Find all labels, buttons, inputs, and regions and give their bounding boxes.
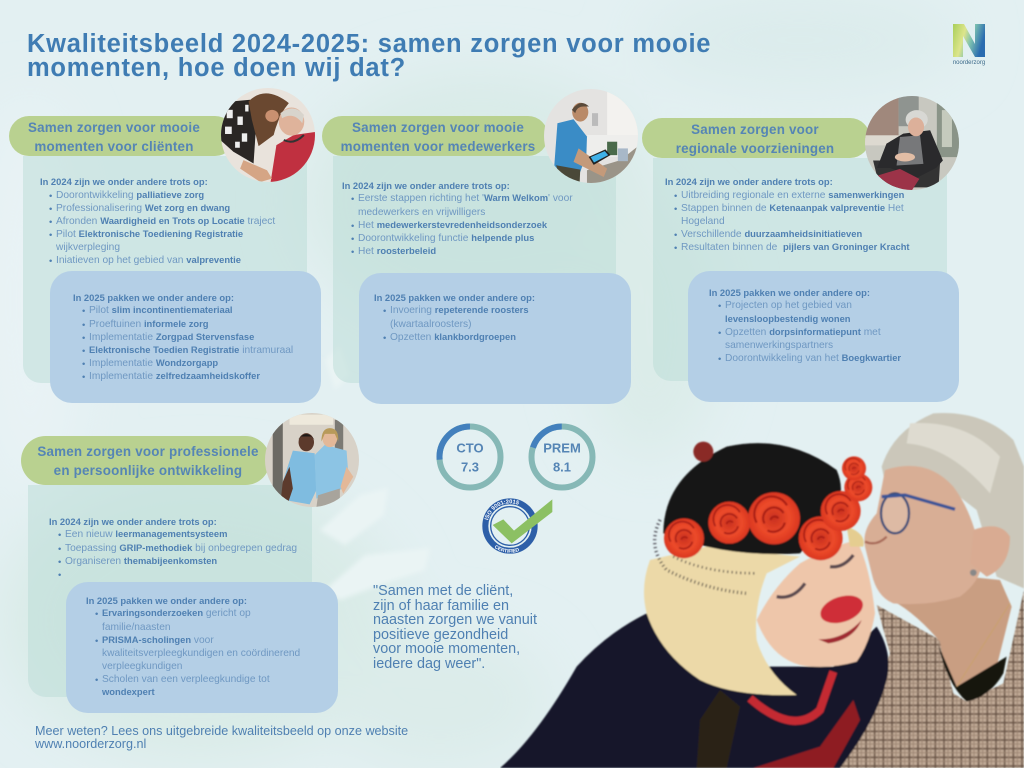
clown hat with roses xyxy=(655,442,872,593)
heading pill xyxy=(642,118,870,158)
badge: ISO 9001:2015 certified xyxy=(482,498,552,554)
text: 2025 plans: wondexpert xyxy=(102,686,155,697)
heading: cliënten: Samen zorgen voor mooie xyxy=(28,120,200,134)
heading: ontwikkeling xyxy=(37,444,259,478)
quote: iedere dag weer". xyxy=(373,656,485,672)
text: 2025 plans: Scholen van een verpleegkundige tot xyxy=(102,674,270,685)
text: 2025 plans: verpleegkundigen xyxy=(102,661,182,672)
box: 2025 plans xyxy=(359,273,631,404)
text: 2024 achievements: Uitbreiding regionale en externe samenwerkingen xyxy=(681,189,904,201)
score: CTO 7.3 xyxy=(436,424,504,490)
heading: regionale voorzieningen xyxy=(676,122,834,156)
heading pill xyxy=(322,116,548,156)
heading: regionale voorzieningen: Samen zorgen voor xyxy=(691,122,819,136)
panel: cliënten xyxy=(9,88,321,403)
text: 2024 achievements xyxy=(40,176,276,266)
clown hair xyxy=(644,547,800,695)
heading: medewerkers: momenten voor medewerkers xyxy=(341,138,535,154)
logo: noorderzorg: noorderzorg xyxy=(953,60,985,66)
footer: more information: www.noorderzorg.nl xyxy=(35,736,146,750)
text: 2025 plans: In 2025 pakken we onder andere op: xyxy=(73,292,234,302)
text: 2025 plans: Elektronische Toedien Registratie intramuraal xyxy=(89,344,293,356)
elderly woman xyxy=(840,413,1024,768)
text: 2025 plans: Invoering repeterende roosters xyxy=(390,304,529,316)
text: 2025 plans: Ervaringsonderzoeken gericht op xyxy=(102,607,251,619)
photo: employee with tablet xyxy=(544,89,638,183)
badge: ISO 9001:2015 certified: ISO 9001:2015 xyxy=(484,499,520,520)
text: 2024 achievements: Afronden Waardigheid en Trots op Locatie traject xyxy=(56,215,275,227)
footer: more information xyxy=(35,724,408,750)
panel: medewerkers xyxy=(322,89,638,404)
heading: medewerkers: Samen zorgen voor mooie xyxy=(352,120,524,134)
photo: two nurses xyxy=(265,413,359,507)
text: 2025 plans: In 2025 pakken we onder andere op: xyxy=(709,286,870,298)
text: 2024 achievements: Eerste stappen richting het 'Warm Welkom' voor xyxy=(358,192,573,204)
text: 2024 achievements: In 2024 zijn we onder andere trots op: xyxy=(665,176,833,187)
text: 2025 plans: Projecten op het gebied van xyxy=(725,300,852,311)
text: 2025 plans: In 2025 pakken we onder andere op: xyxy=(86,594,247,606)
quote xyxy=(373,583,537,672)
panel background xyxy=(23,156,307,383)
panel: professionele en persoonlijke ontwikkeling xyxy=(21,413,359,713)
panel background xyxy=(28,485,312,697)
clown face xyxy=(757,527,875,667)
quote: positieve gezondheid xyxy=(373,626,508,642)
text: 2025 plans: Doorontwikkeling van het Boegkwartier xyxy=(725,352,901,364)
text: 2025 plans: Implementatie Zorgpad Stervensfase xyxy=(89,331,254,343)
text: 2024 achievements: medewerkers en vrijwilligers xyxy=(358,207,485,218)
score: PREM 8.1 xyxy=(528,424,596,490)
text: 2025 plans xyxy=(709,286,901,364)
text: 2024 achievements: Doorontwikkeling palliatieve zorg xyxy=(56,189,204,201)
panel background xyxy=(653,158,947,381)
text: 2025 plans: Opzetten klankbordgroepen xyxy=(390,331,516,343)
text: 2024 achievements: Het medewerkerstevredenheidsonderzoek xyxy=(358,219,547,231)
text: 2025 plans: In 2025 pakken we onder andere op: xyxy=(374,292,535,302)
box: 2025 plans xyxy=(50,271,321,403)
text: 2024 achievements: Toepassing GRIP-methodiek bij onbegrepen gedrag xyxy=(65,542,297,554)
text: 2024 achievements: Het roosterbeleid xyxy=(358,245,436,257)
text: 2024 achievements xyxy=(342,180,573,257)
text: 2025 plans xyxy=(374,292,535,343)
text: 2025 plans: Implementatie Wondzorgapp xyxy=(89,357,218,369)
text: 2025 plans: Pilot slim incontinentiemateriaal xyxy=(89,304,233,316)
text: 2025 plans xyxy=(86,594,300,697)
heading: medewerkers xyxy=(341,120,535,154)
quote: "Samen met de cliënt, xyxy=(373,583,513,599)
photo: client in wheelchair xyxy=(865,96,959,190)
quote: zijn of haar familie en xyxy=(373,598,509,614)
text: 2024 achievements: Stappen binnen de Ketenaanpak valpreventie Het xyxy=(681,202,904,214)
heading: ontwikkeling: Samen zorgen voor professionele xyxy=(37,444,259,458)
badge: ISO 9001:2015 certified: CERTIFIED xyxy=(495,545,519,553)
text: 2024 achievements: Verschillende duurzaamheidsinitiatieven xyxy=(681,228,862,240)
panel background xyxy=(333,156,616,383)
heading: regionale voorzieningen: regionale voorzieningen xyxy=(676,140,834,156)
text: 2025 plans: samenwerkingspartners xyxy=(725,340,833,351)
text: 2024 achievements xyxy=(49,516,297,576)
quote: naasten zorgen we vanuit xyxy=(373,612,537,628)
heading: cliënten xyxy=(28,120,200,154)
clown scarf and necklace xyxy=(697,672,860,768)
text: 2024 achievements: Doorontwikkeling functie helpende plus xyxy=(358,232,534,244)
text: 2024 achievements: In 2024 zijn we onder andere trots op: xyxy=(40,176,208,187)
text: 2024 achievements: Professionalisering Wet zorg en dwang xyxy=(56,202,230,214)
footer: more information: Meer weten? Lees ons uitgebreide kwaliteitsbeeld op onze website xyxy=(35,724,408,738)
text: 2024 achievements xyxy=(665,176,910,253)
text: 2024 achievements: wijkverpleging xyxy=(56,242,120,253)
quote: voor mooie momenten, xyxy=(373,641,520,657)
title xyxy=(27,30,711,82)
photo: clown receiving a kiss from elderly woman xyxy=(500,412,1024,768)
heading pill xyxy=(21,436,270,485)
score: CTO 7.3: CTO xyxy=(456,440,484,456)
text: 2025 plans: Opzetten dorpsinformatiepunt met xyxy=(725,326,881,338)
text: 2024 achievements: In 2024 zijn we onder andere trots op: xyxy=(49,516,217,526)
score: PREM 8.1: 8.1 xyxy=(553,460,571,474)
text: 2025 plans: PRISMA-scholingen voor xyxy=(102,634,214,646)
text: 2025 plans: Implementatie zelfredzaamheidskoffer xyxy=(89,370,260,382)
photo: carer and client xyxy=(221,88,315,182)
text: 2024 achievements: In 2024 zijn we onder andere trots op: xyxy=(342,180,510,190)
title: momenten, hoe doen wij dat? xyxy=(27,54,406,82)
text: 2025 plans xyxy=(73,292,293,382)
text: 2025 plans: levensloopbestendig wonen xyxy=(725,313,851,324)
title: Kwaliteitsbeeld 2024-2025: samen zorgen voor mooie xyxy=(27,30,711,58)
text: 2024 achievements: Hogeland xyxy=(681,216,725,227)
text: 2025 plans: Proeftuinen informele zorg xyxy=(89,318,209,330)
text: 2024 achievements: Organiseren themabijeenkomsten xyxy=(65,555,217,567)
text: 2024 achievements: Resultaten binnen de pijlers van Groninger Kracht xyxy=(681,241,910,253)
text: 2024 achievements: Iniatieven op het gebied van valpreventie xyxy=(56,254,241,266)
score: PREM 8.1: PREM xyxy=(543,440,581,456)
heading: ontwikkeling: en persoonlijke ontwikkeling xyxy=(54,462,242,478)
panel: regionale voorzieningen xyxy=(642,96,959,402)
heading: cliënten: momenten voor cliënten xyxy=(34,138,194,154)
text: 2025 plans: (kwartaalroosters) xyxy=(390,319,472,330)
clown jacket xyxy=(500,613,889,768)
score: CTO 7.3: 7.3 xyxy=(461,460,479,474)
text: 2024 achievements: Een nieuw leermanagementsysteem xyxy=(65,528,227,540)
logo: noorderzorg xyxy=(953,24,985,66)
box: 2025 plans xyxy=(688,271,959,402)
text: 2025 plans: familie/naasten xyxy=(102,622,171,633)
text: 2024 achievements: Pilot Elektronische Toediening Registratie xyxy=(56,228,243,240)
text: 2025 plans: kwaliteitsverpleegkundigen en coördinerend xyxy=(102,648,300,659)
heading pill xyxy=(9,116,235,156)
box: 2025 plans xyxy=(66,582,338,713)
